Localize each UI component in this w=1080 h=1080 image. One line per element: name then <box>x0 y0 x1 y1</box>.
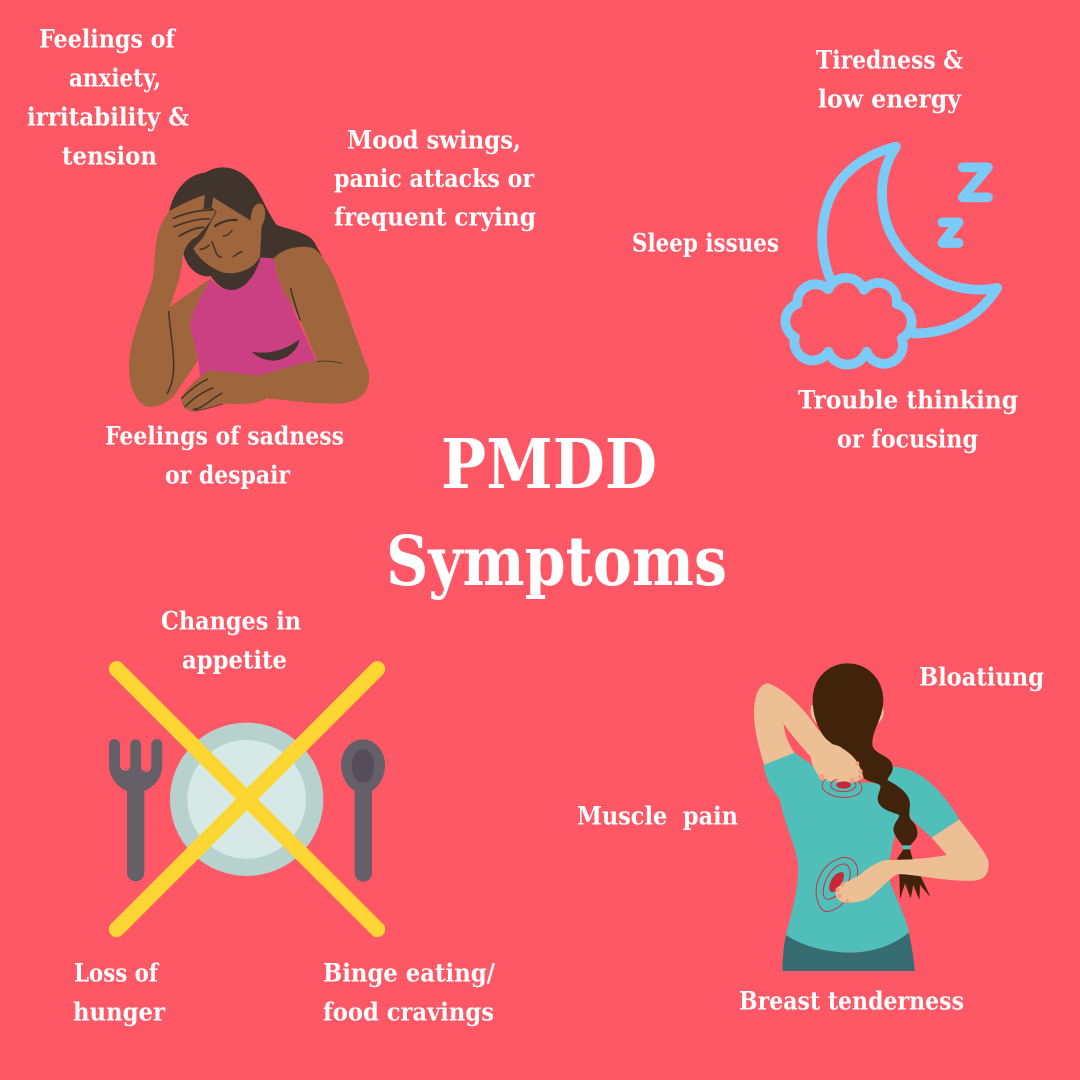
hair tie <box>902 845 911 849</box>
text: mood symptoms: Mood swings, <box>347 126 521 154</box>
text: loss of hunger: Loss of <box>74 958 160 988</box>
text: loss of hunger: hunger <box>73 998 166 1026</box>
fork <box>109 739 162 881</box>
large Z <box>963 167 988 197</box>
text: mood symptoms: panic attacks or <box>334 164 535 193</box>
title: Symptoms <box>386 522 727 602</box>
text: changes in appetite: Changes in <box>161 606 301 636</box>
text: anxiety symptoms: tension <box>62 142 157 170</box>
text: binge eating: Binge eating/ <box>323 958 496 988</box>
fingernails <box>819 761 863 903</box>
small Z <box>942 222 959 243</box>
icon: moon, cloud and Z letters <box>785 147 997 365</box>
text: sleep issues: Sleep issues <box>632 228 779 258</box>
text: trouble thinking <box>798 386 1018 454</box>
cloud <box>785 278 912 365</box>
text: binge eating: food cravings <box>323 998 494 1026</box>
plate <box>170 723 323 876</box>
text: breast tenderness: Breast tenderness <box>739 986 964 1016</box>
text: changes in appetite: appetite <box>182 646 287 674</box>
text: trouble thinking: or focusing <box>837 424 978 454</box>
text: anxiety symptoms: anxiety, <box>69 64 161 92</box>
icon: crossed-out plate and cutlery <box>109 669 385 929</box>
text: tiredness <box>816 46 963 114</box>
text: trouble thinking: Trouble thinking <box>798 386 1018 414</box>
text: bloating: Bloatiung <box>919 662 1044 692</box>
hair <box>168 167 322 290</box>
hair below tie <box>897 849 913 859</box>
title <box>386 425 727 602</box>
text: changes in appetite <box>161 606 301 674</box>
lower hand <box>836 860 897 903</box>
shadow under bust <box>252 339 299 361</box>
moon crescent <box>822 147 997 333</box>
arm propping head <box>129 195 215 407</box>
trousers <box>782 933 915 971</box>
lower pain marker <box>816 857 858 912</box>
upper hand <box>811 744 863 782</box>
text: sadness symptoms <box>105 422 344 490</box>
arm on table <box>181 247 369 412</box>
illustration: distressed woman <box>129 167 369 412</box>
text: sadness symptoms: Feelings of sadness <box>105 422 344 450</box>
text: loss of hunger <box>73 958 166 1026</box>
text: sadness symptoms: or despair <box>165 460 291 490</box>
title: PMDD <box>441 425 657 505</box>
face <box>193 197 265 273</box>
spoon <box>341 739 385 882</box>
text: anxiety symptoms <box>27 24 189 170</box>
top <box>190 257 317 377</box>
lower arm <box>836 819 989 903</box>
text: tiredness: low energy <box>818 84 962 114</box>
text: anxiety symptoms: Feelings of <box>39 24 177 54</box>
detail lines <box>167 210 342 411</box>
ears <box>811 705 884 725</box>
yellow cross <box>117 669 377 929</box>
hair and braid <box>813 663 917 846</box>
text: muscle pain: Muscle pain <box>577 802 738 830</box>
text: tiredness: Tiredness & <box>816 46 963 74</box>
shirt <box>763 753 959 953</box>
text: mood symptoms: frequent crying <box>334 202 536 232</box>
illustration: woman with back pain <box>754 663 989 971</box>
hair tail ends <box>897 858 931 900</box>
text: binge eating <box>323 958 496 1026</box>
upper pain marker <box>821 774 863 799</box>
text: anxiety symptoms: irritability & <box>27 102 189 132</box>
raised arm <box>754 683 864 783</box>
text: mood symptoms <box>334 126 536 232</box>
